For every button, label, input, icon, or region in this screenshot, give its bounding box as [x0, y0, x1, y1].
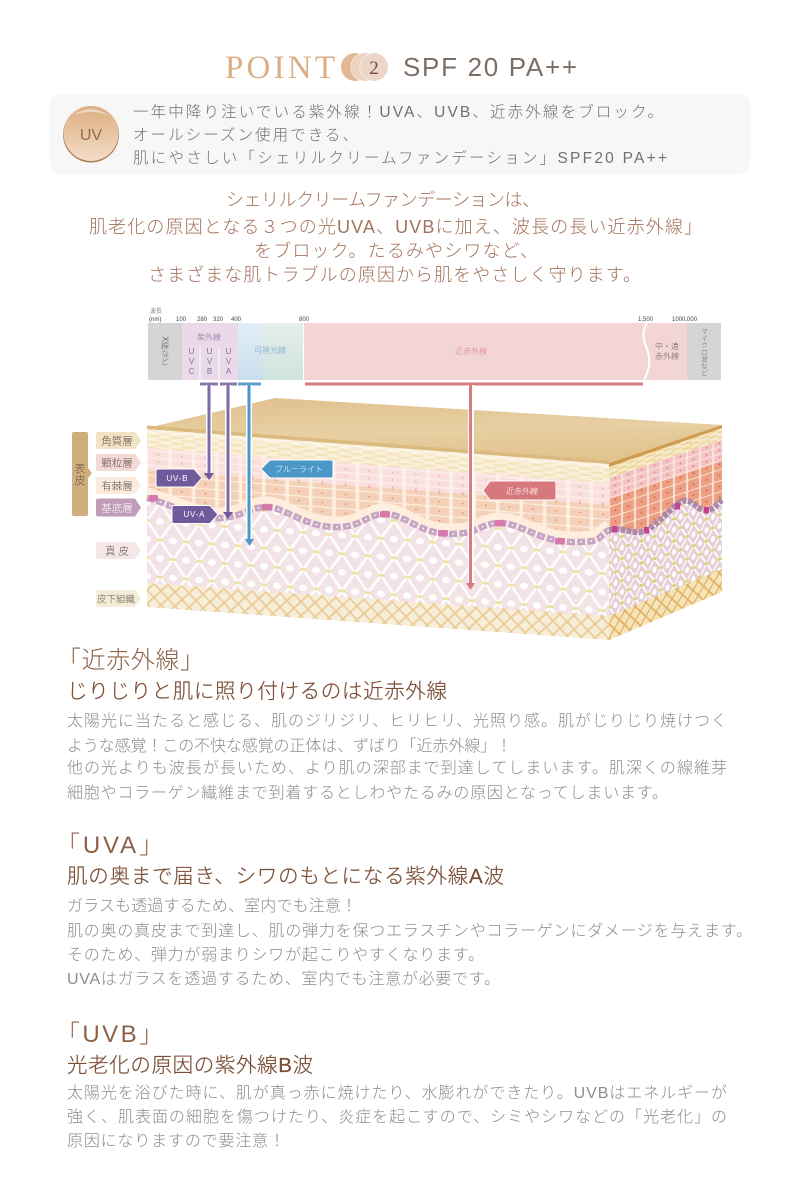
- section: UVB: [56, 1021, 727, 1150]
- chart: wavelength spectrum bar: U: [207, 347, 213, 356]
- body text: [67, 1084, 727, 1150]
- chart: wavelength spectrum bar: 400: [231, 317, 242, 323]
- body text: ガラスも透過するため、室内でも注意！: [67, 897, 357, 915]
- body text: 肌の奥の真皮まで到達し、肌の弾力を保つエラスチンやコラーゲンにダメージを与えます。: [67, 922, 752, 940]
- body text: ような感覚！この不快な感覚の正体は、ずばり「近赤外線」！: [67, 737, 512, 755]
- intro text block: シェリルクリームファンデーションは、: [226, 190, 540, 210]
- panel: UV summary card: [50, 94, 750, 174]
- heading: 「UVB」: [56, 1021, 163, 1048]
- body text: UVAはガラスを透過するため、室内でも注意が必要です。: [67, 970, 500, 988]
- icon: UV badge: UV: [80, 127, 102, 144]
- chart: wavelength spectrum bar: C: [189, 367, 195, 376]
- chart: wavelength spectrum bar: 1,500: [638, 317, 654, 323]
- body text: 細胞やコラーゲン繊維まで到着するとしわやたるみの原因となってしまいます。: [67, 784, 668, 802]
- callout: UV-B: [156, 469, 202, 487]
- chart: wavelength spectrum bar: X線など: [160, 336, 170, 366]
- section: UVA: [56, 832, 752, 988]
- callout: blue light: [261, 460, 333, 478]
- chart: wavelength spectrum bar: 可視光線: [254, 345, 286, 355]
- body text: 太陽光を浴びた時に、肌が真っ赤に焼けたり、水膨れができたり。UVBはエネルギーが: [67, 1084, 727, 1102]
- chart: wavelength spectrum bar: B: [207, 367, 212, 376]
- chart: wavelength spectrum bar: 280: [197, 317, 208, 323]
- label: epidermis: 表: [74, 462, 86, 475]
- chart: wavelength spectrum bar: V: [189, 357, 195, 366]
- label: basal layer: [96, 498, 141, 516]
- legend: skin layer labels: [72, 432, 141, 607]
- heading: 「近赤外線」: [57, 647, 204, 674]
- body text: [67, 712, 727, 802]
- callout: UV-A: UV-A: [184, 510, 205, 519]
- callout: near infrared: 近赤外線: [506, 486, 538, 496]
- label: granular layer: 顆粒層: [101, 458, 133, 470]
- right face of skin: [609, 425, 722, 569]
- chart: wavelength spectrum bar: 320: [213, 317, 224, 323]
- subheading: 肌の奥まで届き、シワのもとになる紫外線A波: [67, 865, 504, 888]
- body text: 原因になりますので要注意！: [67, 1132, 285, 1150]
- label: spinous layer: 有棘層: [101, 480, 133, 492]
- title: POINT 2 SPF 20 PA++: [225, 50, 577, 86]
- callouts: [156, 460, 556, 524]
- chart: wavelength spectrum bar: 1000,000: [672, 317, 698, 323]
- skin top surface: [147, 398, 722, 463]
- callout: UV-A: [172, 506, 218, 524]
- intro text block: さまざまな肌トラブルの原因から肌をやさしく守ります。: [148, 264, 641, 285]
- front face of skin: [147, 428, 609, 575]
- arrow: near infrared: [305, 382, 643, 590]
- chart: wavelength spectrum bar: 800: [299, 317, 310, 323]
- basal layer: [147, 494, 722, 542]
- icon: UV badge: [63, 106, 119, 162]
- chart: wavelength spectrum bar: 紫外線: [197, 332, 221, 342]
- arrows: wavelength penetration: [200, 382, 643, 590]
- body text: [67, 897, 752, 988]
- label: epidermis: [72, 432, 92, 516]
- label: stratum corneum: [96, 432, 141, 449]
- label: basal layer: 基底層: [101, 502, 133, 514]
- label: spinous layer: [96, 477, 141, 494]
- panel: UV summary card: オールシーズン使用できる、: [133, 126, 358, 144]
- subheading: 光老化の原因の紫外線B波: [67, 1054, 313, 1077]
- chart: wavelength spectrum bar: [148, 307, 721, 380]
- chart: wavelength spectrum bar: 赤外線: [655, 351, 679, 361]
- dermis: [147, 498, 609, 617]
- chart: wavelength spectrum bar: 近赤外線: [455, 346, 487, 356]
- label: dermis: 真 皮: [105, 544, 129, 558]
- chart: wavelength spectrum bar: 波長: [150, 307, 162, 315]
- label: granular layer: [96, 454, 141, 471]
- label: epidermis: 皮: [74, 474, 86, 487]
- chart: wavelength spectrum bar: マイクロ波など: [700, 328, 708, 377]
- section: near infrared: [57, 647, 727, 802]
- panel: UV summary card: 肌にやさしい「シェリルクリームファンデーション」SPF20 PA++: [133, 149, 667, 167]
- body text: 強く、肌表面の細胞を傷つけたり、炎症を起こすので、シミやシワなどの「光老化」の: [67, 1108, 727, 1126]
- callout: UV-B: UV-B: [166, 474, 188, 483]
- chart: wavelength spectrum bar: 中・遠: [655, 341, 679, 351]
- label: hypodermis: [96, 590, 141, 607]
- callout: blue light: ブルーライト: [275, 464, 323, 474]
- label: dermis: [96, 542, 141, 559]
- chart: wavelength spectrum bar: 100: [176, 317, 187, 323]
- arrow: UV-B: [200, 382, 218, 480]
- arrow: blue light: [238, 382, 261, 546]
- heading: 「UVA」: [56, 832, 163, 859]
- intro text block: [89, 190, 702, 285]
- arrow: UV-A: [220, 382, 237, 519]
- chart: wavelength spectrum bar: V: [207, 357, 213, 366]
- intro text block: をブロック。たるみやシワなど、: [254, 241, 538, 261]
- body text: 太陽光に当たると感じる、肌のジリジリ、ヒリヒリ、光照り感。肌がじりじり焼けつく: [67, 712, 727, 730]
- label: stratum corneum: 角質層: [101, 434, 133, 448]
- chart: wavelength spectrum bar: U: [226, 347, 232, 356]
- title: POINT 2 SPF 20 PA++: POINT: [225, 50, 335, 86]
- label: hypodermis: 皮下組織: [97, 594, 135, 606]
- title: POINT 2 SPF 20 PA++: SPF 20 PA++: [403, 52, 577, 82]
- panel: UV summary card: 一年中降り注いでいる紫外線！UVA、UVB、近赤外線をブロック。: [133, 103, 663, 121]
- chart: wavelength spectrum bar: V: [226, 357, 232, 366]
- chart: wavelength spectrum bar: U: [189, 347, 195, 356]
- chart: wavelength spectrum bar: A: [226, 367, 232, 376]
- body text: 他の光よりも波長が長いため、より肌の深部まで到達してしまいます。肌深くの線維芽: [67, 759, 727, 777]
- icon: point number circles: 2: [369, 58, 379, 79]
- diagram: skin cross-section: [147, 398, 722, 640]
- body text: そのため、弾力が弱まりシワが起こりやすくなります。: [67, 946, 484, 964]
- subheading: じりじりと肌に照り付けるのは近赤外線: [67, 680, 447, 703]
- icon: point number circles: [341, 52, 388, 82]
- intro text block: 肌老化の原因となる３つの光UVA、UVBに加え、波長の長い近赤外線」: [89, 217, 702, 237]
- hypodermis: [147, 583, 609, 640]
- callout: near infrared: [483, 481, 556, 500]
- chart: wavelength spectrum bar: (nm): [149, 317, 161, 323]
